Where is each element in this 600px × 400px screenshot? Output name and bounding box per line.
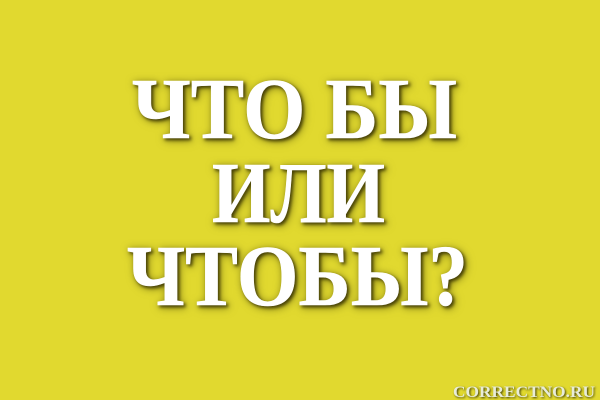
title: three lines — [127, 60, 468, 324]
title line 2: ИЛИ — [212, 144, 385, 241]
title line 3: ЧТОБЫ? — [127, 227, 468, 324]
title line 1: ЧТО БЫ — [132, 60, 457, 157]
